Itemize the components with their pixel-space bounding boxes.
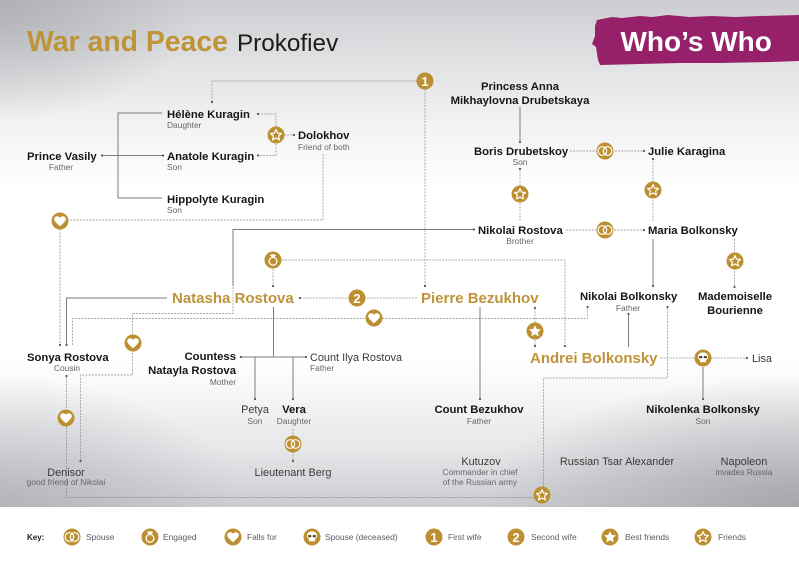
text: Count Ilya Rostova: Count Ilya Rostova (310, 352, 403, 364)
text: Hippolyte Kuragin: Hippolyte Kuragin (167, 194, 264, 206)
connector: ring to Natasha (272, 269, 274, 286)
text: Petya (241, 404, 270, 426)
banner: Who's Who: Who’s Who (620, 26, 772, 57)
text: Countess Natayla Rostova: Natayla Rostova (148, 365, 237, 377)
text: Dolokhov (298, 130, 350, 152)
text: Mademoiselle Bourienne (698, 291, 772, 317)
connector: heart to Sonya (59, 229, 61, 345)
connector: Hélène to first wife (212, 81, 417, 102)
key: spouse deceased: Spouse (deceased) (325, 532, 398, 542)
connector: Denisor to Kutuzov line (66, 427, 534, 498)
text: Kutuzov (443, 456, 518, 487)
key: best friends (602, 528, 669, 546)
text: Denisor (27, 467, 105, 487)
text: Nikolenka Bolkonsky: Nikolenka Bolkonsky (646, 404, 761, 416)
key: spouse: Spouse (86, 532, 115, 542)
text: Natasha Rostova: Natasha Rostova (172, 290, 294, 307)
icon: spouse (596, 142, 614, 160)
connector: friends to Nikolai Bolkonsky (544, 307, 668, 487)
text: Nikolai Bolkonsky: Father (616, 303, 640, 313)
banner: Who's Who (592, 15, 799, 65)
key: first wife (426, 528, 482, 546)
connector: Maria friend Mademoiselle (734, 239, 736, 287)
connector: Maria to Nikolai Bolkonsky (652, 239, 654, 286)
key: friends: Friends (718, 532, 746, 542)
key: falls for (224, 528, 277, 546)
connector: Andrei's son (702, 367, 704, 399)
text: Princess Anna: Princess Anna (481, 81, 560, 93)
connector: star to Dolokhov (284, 134, 294, 136)
text: Sonya Rostova: Sonya Rostova (27, 352, 109, 364)
text: Denisor: Denisor (47, 467, 85, 479)
key: second wife: 2 (512, 530, 520, 545)
text: Nikolenka Bolkonsky (646, 404, 761, 426)
text: Prince Vasily: Prince Vasily (27, 151, 97, 163)
connector: Maria and Julie friends (652, 159, 654, 221)
key: spouse (64, 528, 115, 546)
text: Kutuzov: of the Russian army (443, 477, 518, 487)
tree: Prince Vasily's children (102, 113, 163, 198)
text: Anatole Kuragin (167, 151, 254, 172)
text: Prince Vasily: Father (49, 162, 73, 172)
text: Sonya Rostova: Cousin (54, 363, 80, 373)
text: Andrei Bolkonsky: Andrei Bolkonsky (530, 350, 658, 367)
arrow: Andrei to father (628, 314, 630, 347)
text: Nikolai Rostova: Brother (506, 236, 534, 246)
key: first wife: 1 (430, 530, 438, 545)
text: Petya: Son (248, 416, 263, 426)
text: Napoleon: invades Russia (716, 467, 773, 477)
text: Nikolenka Bolkonsky: Son (696, 416, 711, 426)
text: Russian Tsar Alexander: Russian Tsar Alexander (560, 456, 674, 468)
text: Countess Natayla Rostova: Countess (185, 351, 236, 363)
key: best friends: Best friends (625, 532, 669, 542)
text: Countess Natayla Rostova (148, 351, 237, 387)
text: Princess Anna (451, 81, 590, 107)
text: Hélène Kuragin (167, 109, 250, 130)
text: Hippolyte Kuragin: Son (167, 205, 182, 215)
icon: second wife: 2 (353, 291, 361, 306)
icon: friends (534, 486, 550, 504)
connector: Natasha falls for Denisor (80, 287, 233, 461)
text: Napoleon: Napoleon (721, 456, 767, 468)
icon: falls for (124, 334, 142, 352)
text: Count Ilya Rostova: Father (310, 363, 334, 373)
text: Count Ilya Rostova (310, 352, 403, 373)
connector: Sonya to Nikolai Bolkonsky (72, 307, 588, 345)
key: spouse deceased (304, 528, 398, 546)
icon: spouse (596, 222, 614, 238)
connector: Nikolai and Boris friends (519, 169, 521, 221)
text: Count Bezukhov: Father (467, 416, 491, 426)
text: Vera: Daughter (277, 416, 311, 426)
text: Sonya Rostova (27, 352, 109, 373)
icon: falls for (366, 310, 382, 326)
icon: spouse (284, 436, 302, 452)
text: Kutuzov: Commander in chief (443, 467, 518, 477)
text: Anatole Kuragin: Anatole Kuragin (167, 151, 254, 163)
text: Boris Drubetskoy: Boris Drubetskoy (474, 146, 569, 158)
text: Pierre Bezukhov: Pierre Bezukhov (421, 290, 539, 307)
text: Dolokhov: Friend of both (298, 142, 350, 152)
key: second wife: Second wife (531, 532, 577, 542)
icon: falls for (58, 410, 74, 426)
icon: first wife (416, 72, 434, 90)
key (27, 528, 746, 546)
connector: Natasha brother Nikolai (233, 230, 474, 286)
icon: first wife: 1 (421, 74, 429, 89)
text: Anatole Kuragin: Son (167, 162, 182, 172)
icon: best friends (526, 322, 544, 340)
text: Count Bezukhov (434, 404, 524, 426)
text: Nikolai Bolkonsky: Nikolai Bolkonsky (580, 291, 678, 303)
text: Countess Natayla Rostova: Mother (210, 377, 236, 387)
connector: friends of Dolokhov (258, 114, 276, 156)
connector: first wife to Pierre (424, 89, 426, 286)
text: Boris Drubetskoy (474, 146, 569, 167)
text: Denisor: good friend of Nikolai (27, 477, 105, 487)
icon: second wife (348, 290, 366, 306)
icon: friends (268, 126, 284, 144)
title: War and Peace Prokofiev (27, 26, 339, 58)
connector: Pierre and Andrei best friends (534, 308, 536, 346)
icon: friends (644, 182, 662, 198)
text: Petya: Petya (241, 404, 270, 416)
text: Lisa: Lisa (752, 353, 773, 365)
text: Vera: Vera (282, 404, 307, 416)
connector: Natasha cousin Sonya (66, 298, 167, 345)
text: Hippolyte Kuragin (167, 194, 264, 215)
connector: Pierre's father (479, 307, 481, 399)
connector: Denisor falls for Sonya (66, 376, 68, 408)
text: Princess Anna: Mikhaylovna Drubetskaya (451, 95, 590, 107)
text: Count Bezukhov: Count Bezukhov (434, 404, 524, 416)
text: Boris Drubetskoy: Son (513, 157, 528, 167)
key: friends (694, 528, 746, 546)
connector: Nikolai and Maria spouses (566, 229, 644, 231)
text: Maria Bolkonsky: Maria Bolkonsky (648, 225, 738, 237)
connector: Dolokhov falls for Sonya (68, 154, 323, 220)
icon: spouse deceased (694, 350, 712, 366)
tree: Rostova family (241, 307, 306, 399)
text: Lieutenant Berg: Lieutenant Berg (255, 467, 331, 479)
text: Nikolai Rostova (478, 225, 563, 246)
icon: friends (726, 252, 744, 270)
text: Julie Karagina: Julie Karagina (648, 146, 726, 158)
text: Dolokhov: Dolokhov (298, 130, 350, 142)
key: engaged (142, 528, 197, 546)
key label: Key: (27, 533, 44, 542)
icon: engaged (264, 252, 282, 268)
text: Nikolai Rostova: Nikolai Rostova (478, 225, 563, 237)
text: Hélène Kuragin: Daughter (167, 120, 202, 130)
connector: Natasha engaged to Andrei (282, 260, 565, 346)
connector: Pierre second wife Natasha (300, 297, 417, 299)
icon: friends (512, 186, 528, 202)
text: Hélène Kuragin: Hélène Kuragin (167, 109, 250, 121)
connector: Anna to Boris (519, 107, 521, 142)
text: Prince Vasily (27, 151, 97, 172)
text: Napoleon (716, 456, 773, 477)
key: engaged: Engaged (163, 532, 197, 542)
text: Mademoiselle Bourienne: Mademoiselle (698, 291, 772, 303)
text: Mademoiselle Bourienne: Bourienne (707, 305, 763, 317)
key: falls for: Falls for (247, 532, 277, 542)
connector: Boris and Julie spouses (570, 150, 644, 152)
icon: falls for (52, 212, 68, 230)
text: Nikolai Bolkonsky (580, 291, 678, 313)
key: second wife (508, 528, 577, 546)
text: Kutuzov: Kutuzov (461, 456, 501, 468)
connector: Andrei and Lisa (660, 357, 747, 359)
connector: Vera and Berg spouses (292, 429, 294, 461)
text: Vera (277, 404, 311, 426)
key: first wife: First wife (448, 532, 482, 542)
